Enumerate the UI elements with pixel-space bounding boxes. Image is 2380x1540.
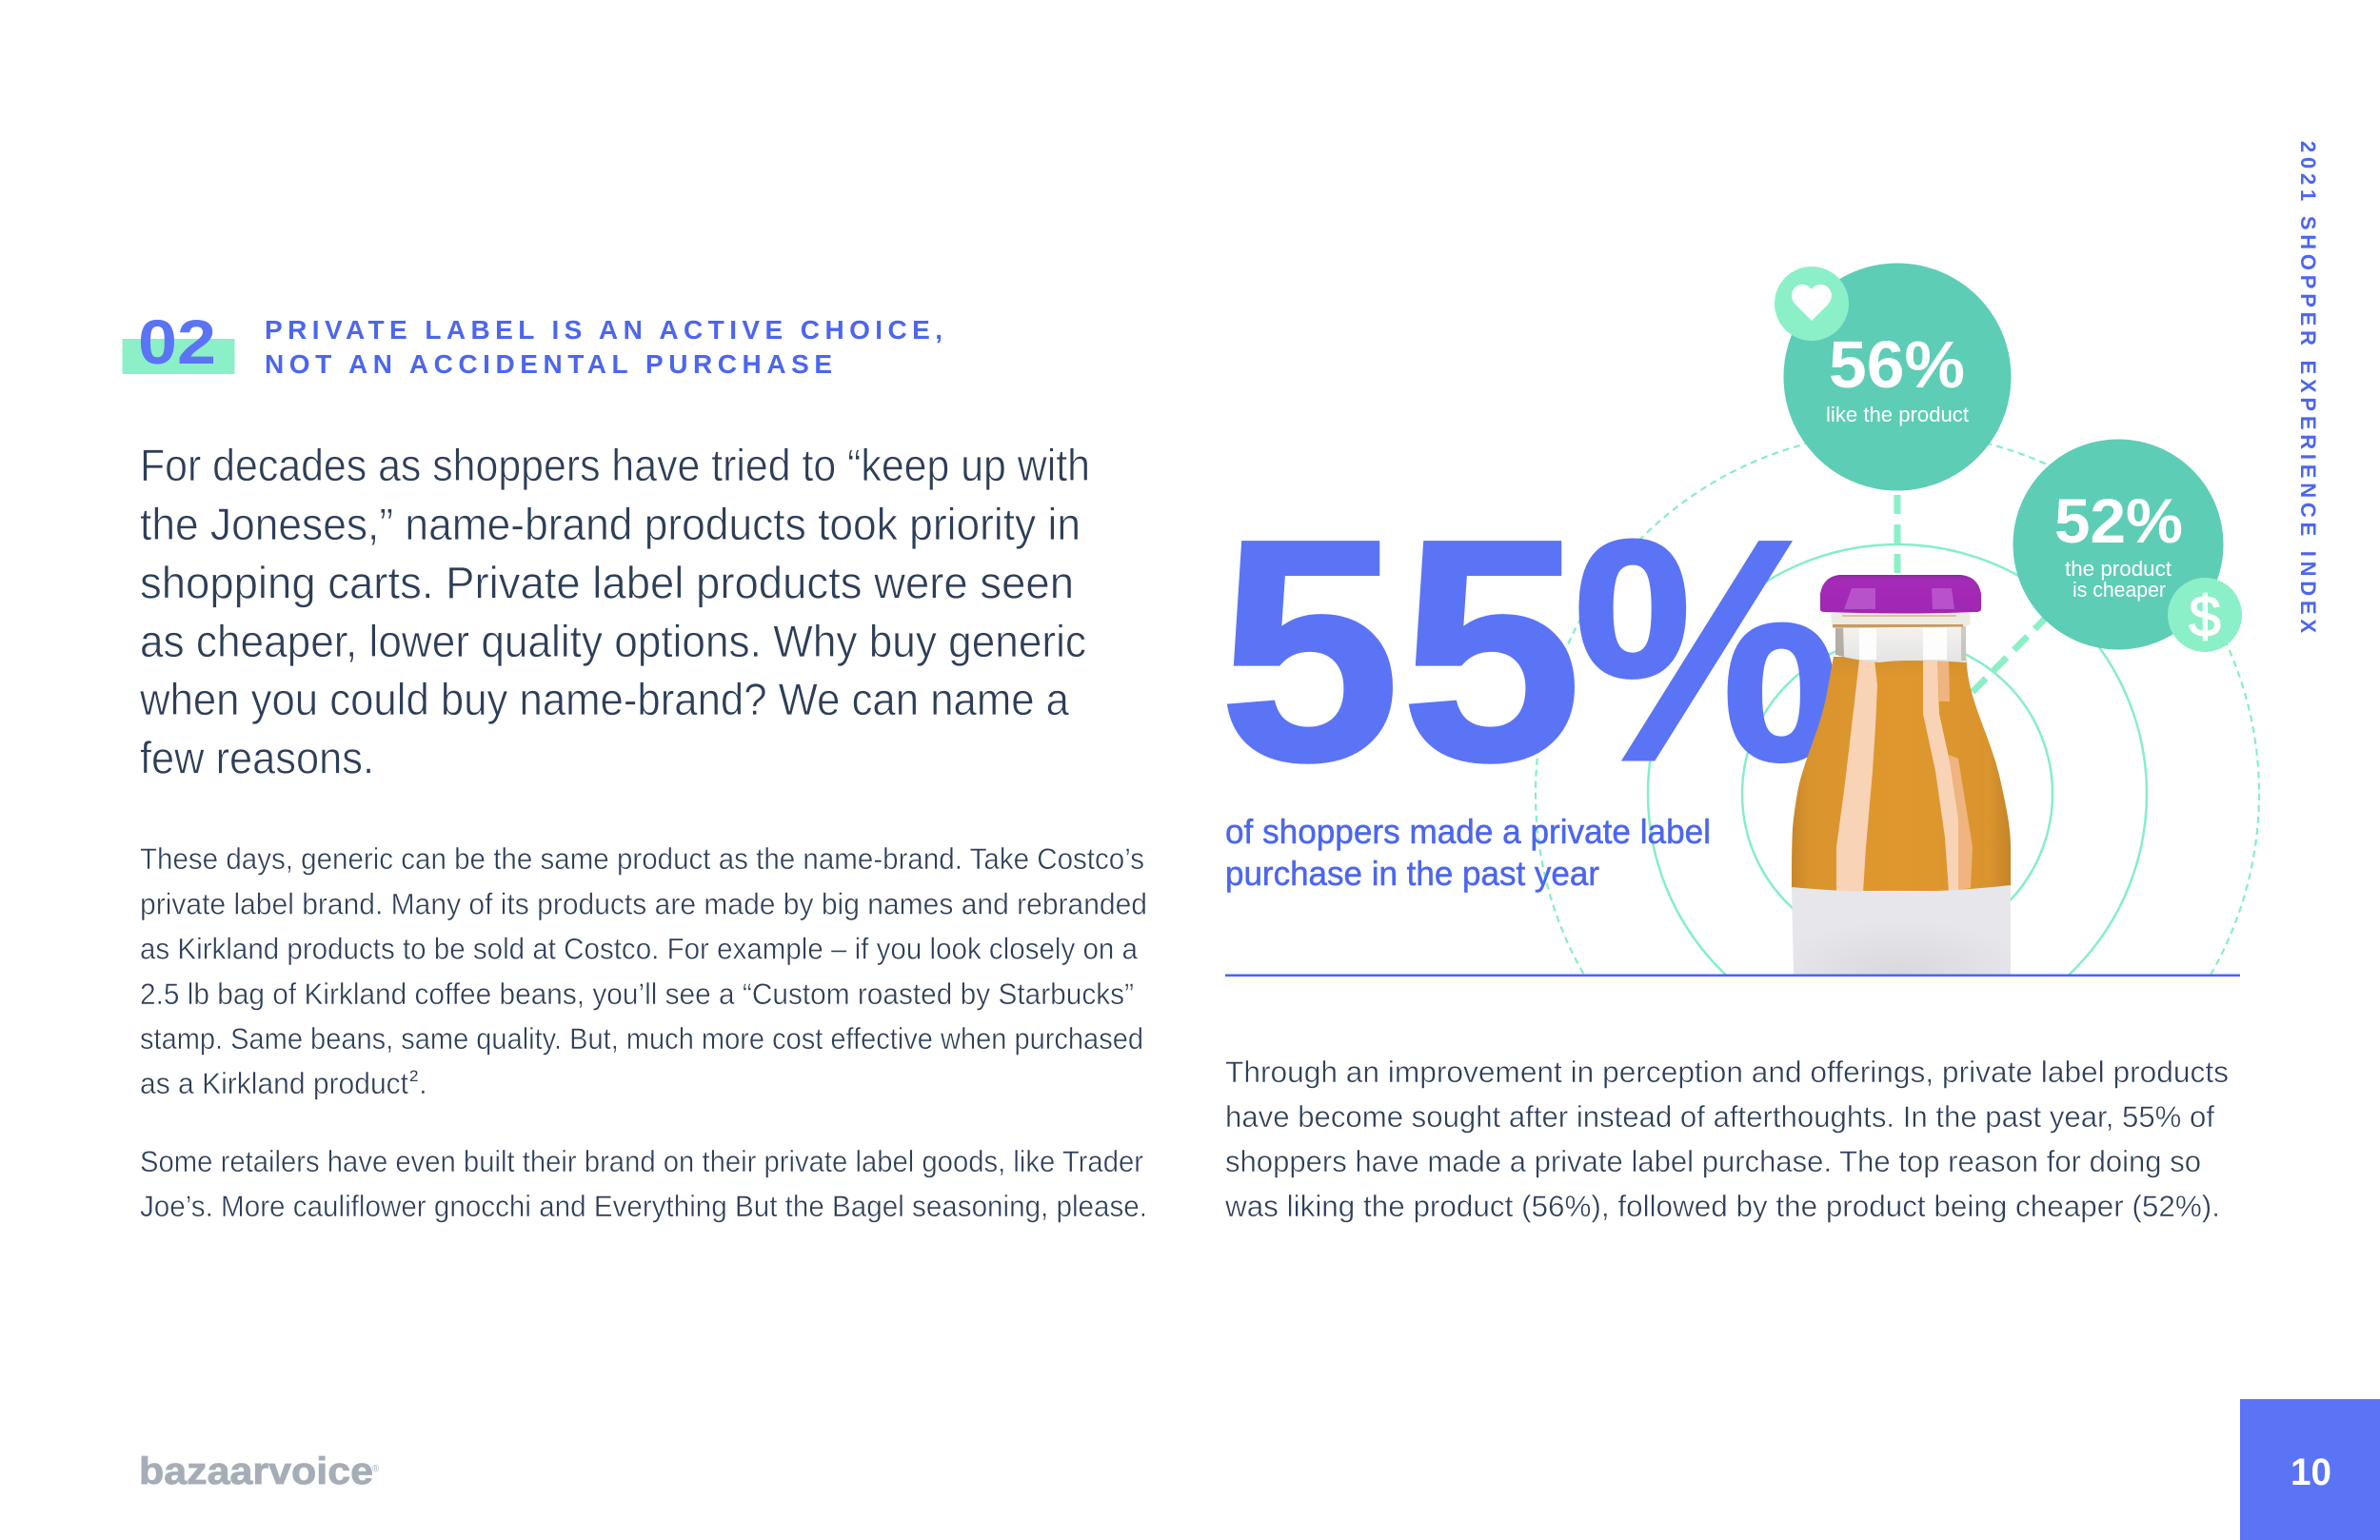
stat caption — [1225, 812, 1711, 893]
big stat 55%: % — [1573, 474, 1841, 827]
lead paragraph: shopping carts. Private label products were seen — [140, 558, 1074, 607]
concentric rings — [1535, 444, 2260, 975]
bottle photo — [1792, 575, 2011, 975]
body paragraph: Costco: These days, generic can be the same product as the name-brand. Take Costco’s — [140, 841, 1144, 876]
icon: dollar — [2168, 578, 2242, 652]
body paragraph: Costco: stamp. Same beans, same quality. But, much more cost effective when purchased — [140, 1021, 1143, 1056]
lead paragraph: as cheaper, lower quality options. Why buy generic — [140, 616, 1086, 666]
page number tab — [2240, 1399, 2380, 1540]
lead paragraph — [139, 440, 1090, 782]
callout: 52% the product is cheaper: is cheaper — [2073, 578, 2166, 602]
body paragraph: Costco: 2 — [409, 1067, 418, 1085]
body paragraph: Trader Joe's: Some retailers have even built their brand on their private label goods, like Trader — [140, 1144, 1143, 1178]
callout: 52% the product is cheaper: the product — [2065, 557, 2172, 581]
section number 02: 02 — [138, 306, 216, 377]
icon: heart — [1775, 267, 1849, 341]
body paragraph: Costco — [140, 841, 1147, 1100]
callout: 52% the product is cheaper: 52% — [2054, 485, 2183, 556]
callout: 56% like the product: like the product — [1826, 403, 1969, 426]
logo: bazaarvoice: bazaarvoice — [139, 1451, 373, 1492]
body paragraph: summary — [1224, 1055, 2229, 1223]
baseline rule — [1225, 975, 2240, 977]
lead paragraph: the Joneses,” name-brand products took priority in — [140, 499, 1081, 549]
lead paragraph: For decades as shoppers have tried to “keep up with — [140, 440, 1090, 490]
body paragraph: summary: have become sought after instead of afterthoughts. In the past year, 55% of — [1225, 1099, 2214, 1134]
section number 02 — [122, 306, 234, 377]
heading: NOT AN ACCIDENTAL PURCHASE — [265, 349, 832, 379]
body paragraph: Trader Joe's — [140, 1144, 1147, 1223]
connector: 52% to bottle — [1973, 617, 2047, 692]
connector: 56% to bottle — [1894, 495, 1900, 573]
logo: bazaarvoice: ® — [372, 1464, 380, 1474]
heading: PRIVATE LABEL IS AN ACTIVE CHOICE, — [265, 315, 942, 345]
body paragraph: Costco: as a Kirkland product — [140, 1066, 408, 1100]
stat caption: purchase in the past year — [1225, 854, 1599, 893]
page number tab: 10 — [2291, 1451, 2331, 1493]
big stat 55%: 55 — [1219, 474, 1582, 827]
callout: 52% the product is cheaper — [2013, 440, 2224, 649]
body paragraph: Trader Joe's: Joe’s. More cauliflower gnocchi and Everything But the Bagel seasoning, please. — [140, 1189, 1147, 1223]
big stat 55% — [1219, 474, 1841, 827]
body paragraph: Costco: as Kirkland products to be sold at Costco. For example – if you look closely on a — [140, 931, 1138, 965]
body paragraph: Costco: private label brand. Many of its products are made by big names and rebranded — [140, 887, 1147, 921]
heading — [265, 315, 942, 379]
body paragraph: Costco: . — [419, 1066, 427, 1100]
side running title: 2021 SHOPPER EXPERIENCE INDEX — [2296, 141, 2320, 633]
body paragraph: summary: was liking the product (56%), followed by the product being cheaper (52%). — [1224, 1189, 2220, 1223]
body paragraph: Costco: 2.5 lb bag of Kirkland coffee beans, you’ll see a “Custom roasted by Starbucks” — [140, 977, 1134, 1011]
lead paragraph: when you could buy name-brand? We can name a — [139, 674, 1070, 724]
lead paragraph: few reasons. — [140, 733, 374, 782]
icon: dollar: $ — [2189, 584, 2221, 648]
callout: 56% like the product: 56% — [1829, 327, 1965, 402]
body paragraph: summary: shoppers have made a private label purchase. The top reason for doing so — [1225, 1144, 2201, 1178]
callout: 56% like the product — [1784, 263, 2011, 491]
body paragraph: summary: Through an improvement in perception and offerings, private label products — [1225, 1055, 2229, 1089]
stat caption: of shoppers made a private label — [1225, 812, 1711, 851]
